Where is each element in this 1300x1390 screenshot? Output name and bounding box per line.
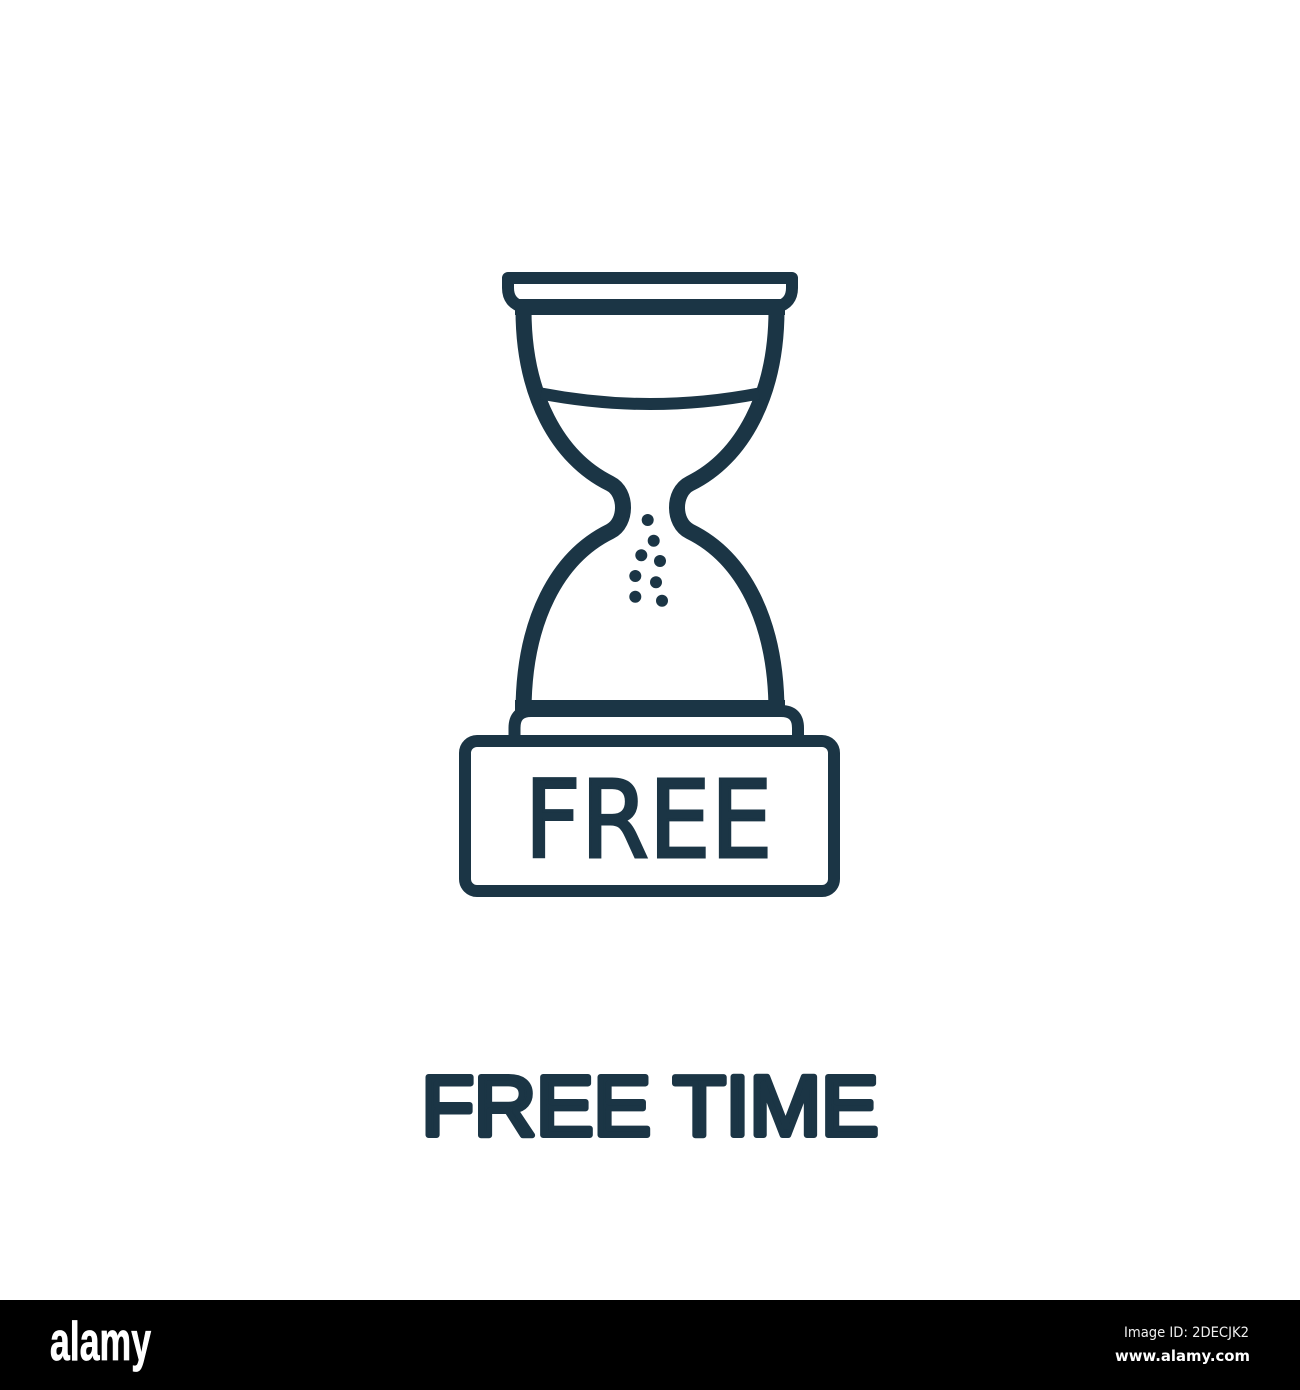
free sign text: FREE: [524, 759, 772, 883]
falling sand grains: [629, 514, 668, 607]
title: free time: FREE TIME: [422, 1059, 878, 1153]
footer bar: [0, 1300, 1300, 1390]
footer image id: Image ID: 2DECJK2: [1124, 1325, 1249, 1341]
footer logo: alamy: alamy: [50, 1310, 151, 1372]
hourglass glass outline: [524, 310, 776, 712]
hourglass base: [514, 700, 798, 738]
free sign box: [465, 741, 834, 891]
hourglass top rim: [508, 278, 792, 315]
icon: hourglass with free sign: [465, 278, 834, 891]
footer website: www.alamy.com: [1115, 1347, 1250, 1365]
sand level line: [541, 394, 759, 404]
